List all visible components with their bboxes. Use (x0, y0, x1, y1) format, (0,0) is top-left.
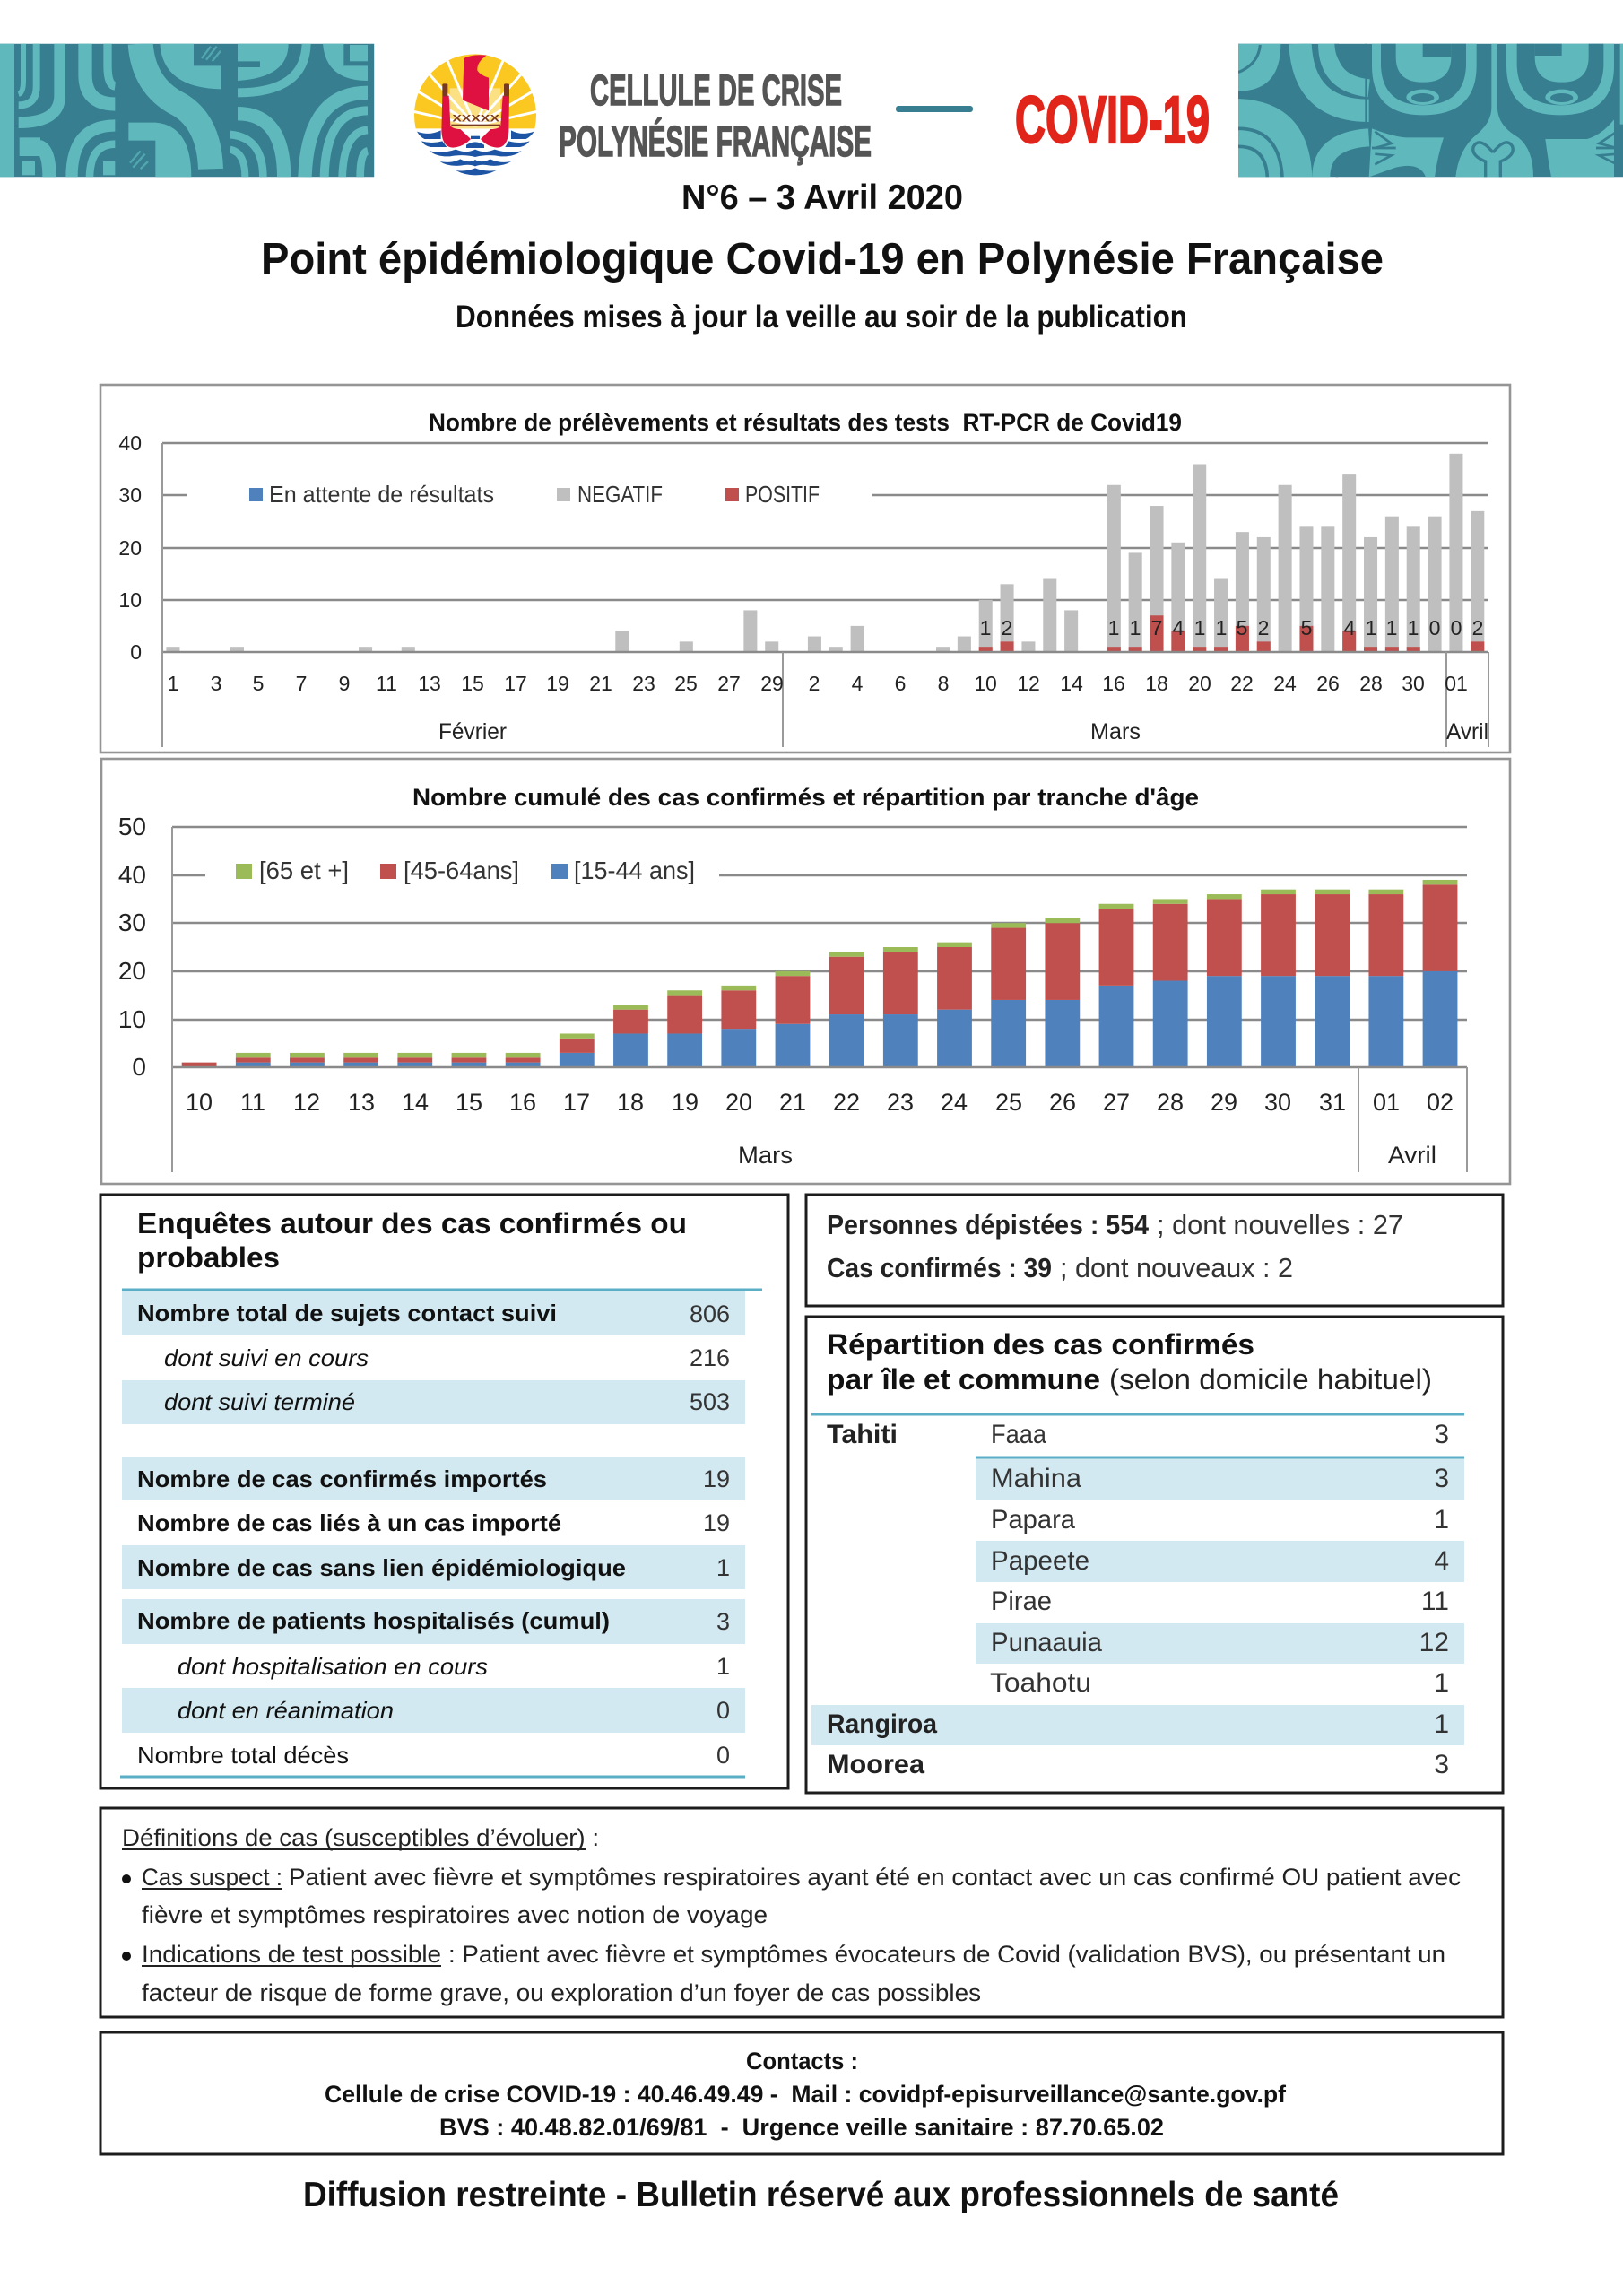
row: no known link: Nombre de cas sans lien épidémiologique (137, 1554, 626, 1581)
positive count labels: 1 (1366, 616, 1376, 639)
row: Mahina (991, 1464, 1449, 1493)
row: Moorea: Moorea (827, 1750, 924, 1779)
x axis day labels: 31 (1319, 1089, 1346, 1116)
row: deaths: Nombre total décès (137, 1742, 349, 1769)
x axis day labels: 27 (1103, 1089, 1130, 1116)
row: Punaauia: Punaauia (991, 1628, 1102, 1657)
x axis day labels: 2 (809, 672, 820, 695)
positive count labels: 7 (1151, 616, 1162, 639)
header title: Cellule de crise (559, 67, 872, 166)
x axis day labels: 25 (674, 672, 698, 695)
x axis day labels: 23 (632, 672, 655, 695)
figure: confirmed cases: ; dont nouveaux : 2 (1060, 1252, 1293, 1283)
panel: contacts (100, 2032, 1503, 2154)
row: deaths: 0 (716, 1742, 730, 1769)
month labels: Avril (1446, 719, 1488, 744)
row: Punaauia (991, 1628, 1449, 1657)
x axis day labels (186, 1089, 1454, 1116)
row: Rangiroa: 1 (1434, 1709, 1449, 1739)
month labels: Mars (1090, 719, 1141, 744)
x axis day labels: 12 (293, 1089, 320, 1116)
panel: cases by island and commune (806, 1317, 1503, 1793)
x axis day labels: 28 (1157, 1089, 1184, 1116)
header banner: right Polynesian pattern (1238, 44, 1623, 177)
row: linked cases: 19 (703, 1509, 730, 1536)
month labels: Mars (738, 1142, 793, 1169)
panel: contacts: Cellule de crise COVID-19 : 40.46.49.49 - Mail : covidpf-episurveillance@sante.gov.pf (325, 2081, 1287, 2108)
row: Papeete (991, 1546, 1449, 1576)
header title: Cellule de crise: CELLULE DE CRISE (590, 67, 842, 115)
positive count labels: 1 (1216, 616, 1227, 639)
x axis day labels: 14 (1060, 672, 1083, 695)
x axis day labels: 17 (563, 1089, 590, 1116)
row: follow-up ongoing: 216 (690, 1344, 730, 1371)
row: Papeete: Papeete (991, 1546, 1089, 1576)
panel heading: (selon domicile habituel) (1109, 1363, 1432, 1396)
x axis day labels: 15 (461, 672, 484, 695)
definition: test indications: facteur de risque de forme grave, ou exploration d’un foyer de cas possibles (142, 1979, 981, 2006)
row: intensive care: 0 (716, 1697, 730, 1724)
x axis day labels: 10 (974, 672, 997, 695)
main title: Point épidémiologique Covid-19 en Polynésie Française (261, 235, 1384, 283)
row: Pirae: 11 (1421, 1587, 1449, 1616)
x axis day labels: 6 (895, 672, 906, 695)
x axis day labels: 30 (1264, 1089, 1291, 1116)
row: imported cases: 19 (703, 1465, 730, 1492)
definition: suspect case: fièvre et symptômes respiratoires avec notion de voyage (142, 1901, 768, 1928)
subtitle: Données mises à jour la veille au soir de la publication (456, 300, 1187, 335)
logo text: canoe platform: XXXXX (452, 113, 500, 124)
month labels (438, 719, 1488, 744)
x axis day labels: 18 (1145, 672, 1168, 695)
y axis labels: 40 (118, 431, 142, 455)
positive count labels: 2 (1002, 616, 1012, 639)
y axis labels: 0 (130, 640, 142, 664)
y axis labels: 20 (118, 957, 146, 985)
x axis day labels: 19 (546, 672, 569, 695)
definitions heading: Définitions de cas (susceptibles d’évoluer) : (122, 1824, 599, 1851)
header title: Cellule de crise: POLYNÉSIE FRANÇAISE (559, 117, 872, 166)
x axis day labels: 16 (509, 1089, 536, 1116)
x axis day labels: 11 (376, 672, 397, 695)
x axis day labels: 27 (717, 672, 741, 695)
x axis day labels: 16 (1102, 672, 1125, 695)
y axis labels: 10 (118, 588, 142, 612)
footer notice: Diffusion restreinte - Bulletin réservé aux professionnels de santé (303, 2176, 1339, 2214)
chart title: tests: Nombre de prélèvements et résultats des tests RT-PCR de Covid19 (429, 409, 1182, 436)
row: currently hospitalised (178, 1653, 730, 1680)
positive count labels: 0 (1451, 616, 1462, 639)
row: no known link: 1 (716, 1554, 730, 1581)
row: Faaa: Faaa (991, 1420, 1046, 1449)
x axis day labels: 24 (941, 1089, 968, 1116)
panel: contacts: Contacts : (746, 2048, 858, 2074)
definition: test indications: Indications de test possible (142, 1941, 441, 1968)
figure: confirmed cases: Cas confirmés : 39 (827, 1252, 1052, 1283)
panel: cumulative cases chart (101, 759, 1510, 1184)
island: Tahiti: Tahiti (827, 1420, 898, 1449)
x axis day labels: 13 (348, 1089, 375, 1116)
x axis day labels: 30 (1402, 672, 1425, 695)
y axis labels: 30 (118, 483, 142, 507)
figure: people tested: ; dont nouvelles : 27 (1157, 1209, 1403, 1240)
row: Pirae: Pirae (991, 1587, 1052, 1616)
x axis day labels: 20 (1188, 672, 1211, 695)
x axis day labels: 13 (418, 672, 441, 695)
x axis day labels: 23 (887, 1089, 914, 1116)
row: total contacts (137, 1300, 730, 1327)
positive count labels (980, 616, 1483, 639)
y axis labels (118, 431, 142, 664)
row: Toahotu: 1 (1434, 1668, 1449, 1698)
positive count labels: 1 (1130, 616, 1141, 639)
month labels: Février (438, 719, 507, 744)
row: Pirae (991, 1587, 1449, 1616)
row: Moorea: 3 (1434, 1750, 1449, 1779)
x axis day labels: 12 (1017, 672, 1040, 695)
row: deaths (137, 1742, 730, 1769)
header title: COVID-19: COVID-19 (1015, 83, 1210, 157)
row: follow-up finished: 503 (690, 1388, 730, 1415)
row: Faaa: 3 (1434, 1420, 1449, 1449)
row: currently hospitalised: 1 (716, 1653, 730, 1680)
x axis day labels: 21 (589, 672, 612, 695)
row: Rangiroa (827, 1709, 1449, 1739)
definition: suspect case: Cas suspect : (142, 1864, 282, 1891)
x axis day labels: 1 (168, 672, 178, 695)
row: intensive care: dont en réanimation (178, 1697, 394, 1724)
x axis day labels: 5 (253, 672, 264, 695)
row: imported cases: Nombre de cas confirmés importés (137, 1465, 547, 1492)
positive count labels: 1 (1194, 616, 1205, 639)
x axis day labels: 15 (456, 1089, 482, 1116)
x axis day labels: 29 (760, 672, 784, 695)
legend: age groups: [15-44 ans] (574, 857, 695, 884)
row: Punaauia: 12 (1419, 1628, 1449, 1657)
positive count labels: 1 (1408, 616, 1419, 639)
row: linked cases (137, 1509, 730, 1536)
y axis labels: 20 (118, 536, 142, 560)
x axis day labels: 25 (995, 1089, 1022, 1116)
x axis day labels: 02 (1427, 1089, 1454, 1116)
issue number and date: N°6 – 3 Avril 2020 (681, 178, 963, 217)
stacked bar chart: cases by age group (182, 880, 1457, 1067)
y axis labels: 0 (132, 1053, 146, 1081)
positive count labels: 2 (1472, 616, 1483, 639)
figure: people tested: Personnes dépistées : 554 (827, 1209, 1150, 1240)
row: hospitalised: Nombre de patients hospitalisés (cumul) (137, 1607, 610, 1634)
y axis labels: 30 (118, 909, 146, 936)
positive count labels: 1 (980, 616, 991, 639)
row: Mahina: Mahina (991, 1464, 1081, 1493)
row: Moorea (827, 1750, 1449, 1779)
legend: age groups: [45-64ans] (404, 857, 519, 884)
y axis labels: 50 (118, 813, 146, 840)
y axis labels (118, 813, 146, 1081)
row: follow-up finished: dont suivi terminé (164, 1388, 355, 1415)
definition: test indications: : Patient avec fièvre et symptômes évocateurs de Covid (validation BVS), ou présentant un (448, 1941, 1445, 1968)
definition: test indications (122, 1941, 1445, 2006)
row: Papara: 1 (1434, 1505, 1449, 1535)
legend: tests (249, 481, 820, 508)
definition: suspect case: Patient avec fièvre et symptômes respiratoires ayant été en contact avec un cas confirmé OU patient avec (289, 1864, 1461, 1891)
row: total contacts: Nombre total de sujets contact suivi (137, 1300, 557, 1326)
panel: key figures (806, 1195, 1503, 1306)
row: Papara: Papara (991, 1505, 1075, 1535)
definition: suspect case (122, 1864, 1461, 1928)
row: Toahotu (990, 1668, 1449, 1698)
row: intensive care (178, 1697, 730, 1724)
x axis day labels: 4 (852, 672, 864, 695)
chart title: cases: Nombre cumulé des cas confirmés et répartition par tranche d'âge (412, 784, 1199, 811)
x axis day labels: 28 (1359, 672, 1383, 695)
row: linked cases: Nombre de cas liés à un cas importé (137, 1509, 561, 1536)
positive count labels: 2 (1258, 616, 1269, 639)
x axis day labels: 8 (938, 672, 949, 695)
x axis day labels: 10 (186, 1089, 213, 1116)
x axis day labels: 26 (1049, 1089, 1076, 1116)
header banner: left Polynesian pattern (0, 44, 374, 177)
x axis day labels: 9 (339, 672, 350, 695)
x axis day labels: 18 (617, 1089, 644, 1116)
x axis day labels: 01 (1445, 672, 1468, 695)
x axis day labels: 19 (672, 1089, 699, 1116)
panel: RT-PCR tests chart (100, 385, 1510, 752)
x axis day labels: 22 (1230, 672, 1254, 695)
panel: contact tracing table (100, 1195, 788, 1788)
x axis day labels: 20 (725, 1089, 752, 1116)
header dash (896, 106, 973, 112)
panel heading: probables (137, 1241, 280, 1274)
row: Faaa (991, 1420, 1449, 1449)
x axis day labels: 22 (833, 1089, 860, 1116)
x axis day labels: 14 (402, 1089, 429, 1116)
x axis day labels: 29 (1211, 1089, 1237, 1116)
panel heading: Répartition des cas confirmés (827, 1328, 1254, 1361)
row: Mahina: 3 (1434, 1464, 1449, 1493)
y axis labels: 10 (118, 1005, 146, 1033)
x axis day labels (168, 672, 1468, 695)
legend: tests: NEGATIF (577, 481, 663, 508)
legend: tests: En attente de résultats (269, 481, 494, 508)
positive count labels: 0 (1429, 616, 1440, 639)
row: hospitalised: 3 (716, 1608, 730, 1635)
month labels: Avril (1388, 1142, 1436, 1169)
positive count labels: 4 (1344, 616, 1356, 639)
row: follow-up ongoing (164, 1344, 730, 1371)
x axis day labels: 17 (504, 672, 527, 695)
x axis day labels: 01 (1373, 1089, 1400, 1116)
legend: age groups (236, 857, 695, 884)
positive count labels: 5 (1237, 616, 1247, 639)
positive count labels: 5 (1301, 616, 1312, 639)
row: Toahotu: Toahotu (990, 1668, 1091, 1698)
bar chart: tests per day (166, 454, 1484, 652)
row: Papeete: 4 (1434, 1546, 1449, 1576)
month labels (738, 1142, 1436, 1169)
row: Rangiroa: Rangiroa (827, 1709, 937, 1739)
y axis labels: 40 (118, 861, 146, 889)
x axis day labels: 26 (1316, 672, 1340, 695)
panel heading (827, 1328, 1432, 1396)
legend: tests: POSITIF (745, 481, 820, 508)
row: follow-up ongoing: dont suivi en cours (164, 1344, 369, 1371)
x axis day labels: 7 (296, 672, 307, 695)
panel: case definitions (100, 1808, 1503, 2017)
positive count labels: 1 (1108, 616, 1119, 639)
panel: contacts: BVS : 40.48.82.01/69/81 - Urgence veille sanitaire : 87.70.65.02 (439, 2114, 1164, 2141)
panel heading: par île et commune (827, 1363, 1100, 1396)
row: total contacts: 806 (690, 1300, 730, 1327)
row: follow-up finished (164, 1388, 730, 1415)
row: Papara (991, 1505, 1449, 1535)
x axis day labels: 3 (211, 672, 221, 695)
x axis day labels: 11 (240, 1089, 265, 1116)
logo: coat of arms of French Polynesia (410, 52, 541, 176)
figure: confirmed cases (827, 1252, 1293, 1283)
positive count labels: 4 (1173, 616, 1185, 639)
x axis day labels: 24 (1273, 672, 1297, 695)
legend: age groups: [65 et +] (259, 857, 349, 884)
row: currently hospitalised: dont hospitalisation en cours (178, 1653, 488, 1680)
row: imported cases (137, 1465, 730, 1492)
x axis day labels: 21 (779, 1089, 806, 1116)
panel heading: Enquêtes autour des cas confirmés ou (137, 1207, 687, 1239)
panel heading (137, 1207, 687, 1274)
positive count labels: 1 (1386, 616, 1397, 639)
figure: people tested (827, 1209, 1403, 1240)
